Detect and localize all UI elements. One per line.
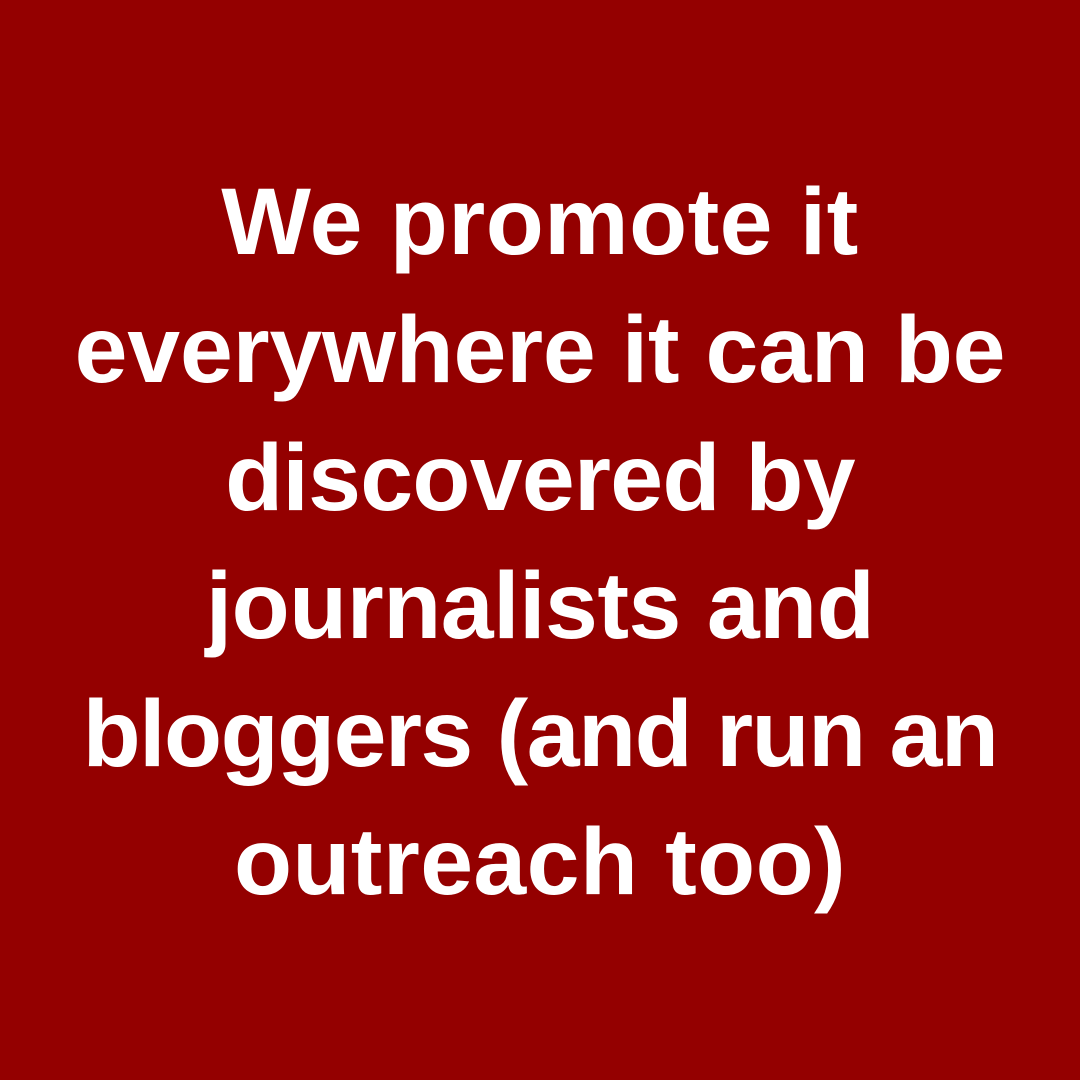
headline text: [75, 169, 1005, 915]
headline text: We promote it: [221, 169, 859, 275]
headline text: outreach too): [234, 809, 846, 915]
headline text: bloggers (and run an: [83, 681, 997, 787]
headline text: journalists and: [206, 553, 874, 659]
headline text: discovered by: [225, 425, 855, 531]
headline text: everywhere it can be: [75, 297, 1005, 403]
